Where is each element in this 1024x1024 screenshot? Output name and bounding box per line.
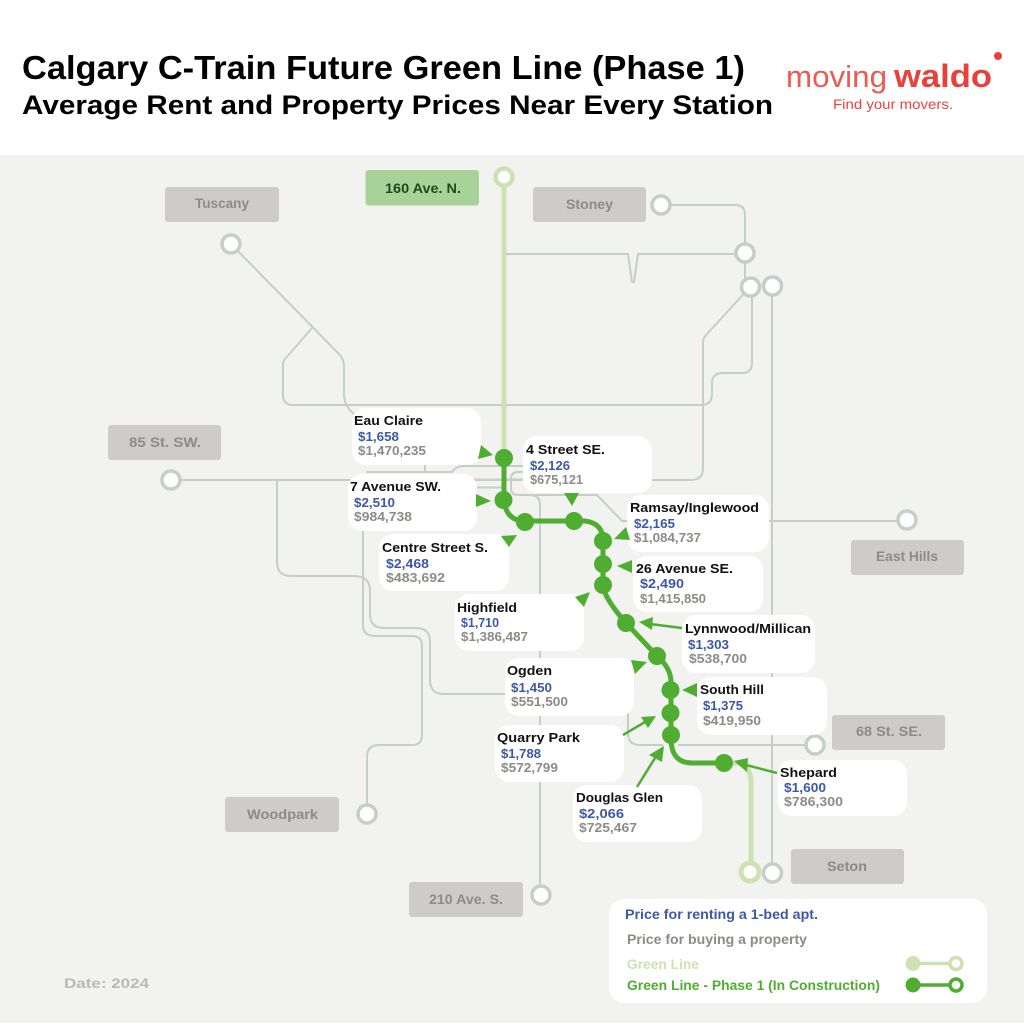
card: Douglas Glen xyxy=(573,785,702,842)
card: Shepard: $786,300 xyxy=(784,794,843,809)
card: 26 Avenue SE.: $1,415,850 xyxy=(640,591,706,606)
logo: moving waldo: Find your movers. xyxy=(833,96,953,112)
card: Centre Street S.: $2,468 xyxy=(386,556,429,571)
date: Date: 2024 xyxy=(64,976,150,991)
card: 4 Street SE. xyxy=(523,436,652,493)
card: Lynnwood/Millican: Lynnwood/Millican xyxy=(685,621,811,636)
card: Lynnwood/Millican xyxy=(682,615,815,673)
title: Calgary C-Train Future Green Line (Phase 1) xyxy=(22,49,745,86)
card: Eau Claire: $1,470,235 xyxy=(358,443,426,458)
card: South Hill: $1,375 xyxy=(703,698,743,713)
card: 4 Street SE.: $675,121 xyxy=(530,472,583,487)
label: Tuscany: Tuscany xyxy=(195,195,249,211)
label: Tuscany xyxy=(165,187,279,222)
label: Stoney: Stoney xyxy=(566,196,613,212)
legend symbol: Green Line xyxy=(906,956,962,971)
card: South Hill: South Hill xyxy=(700,682,764,697)
card: Douglas Glen: Douglas Glen xyxy=(576,790,663,805)
card: Ogden xyxy=(505,658,634,716)
card: South Hill xyxy=(697,677,827,735)
label: Woodpark xyxy=(225,797,339,832)
label: East Hills: East Hills xyxy=(876,548,938,564)
card: Ramsay/Inglewood xyxy=(627,495,769,552)
pointer arrows xyxy=(476,445,777,787)
card: Centre Street S. xyxy=(379,534,509,591)
card: Eau Claire: $1,658 xyxy=(358,429,399,444)
legend: Price for renting a 1-bed apt. xyxy=(625,907,818,922)
card: 4 Street SE.: 4 Street SE. xyxy=(526,442,605,457)
Phase 1 stations xyxy=(494,449,733,772)
label: 68 St. SE. xyxy=(832,715,945,750)
card: Highfield: $1,386,487 xyxy=(461,629,528,644)
card: 7 Avenue SW.: 7 Avenue SW. xyxy=(350,479,441,494)
legend symbol: Phase 1 xyxy=(906,978,962,992)
card: Shepard: $1,600 xyxy=(784,780,826,795)
label: Seton xyxy=(791,849,904,884)
terminal stop: 160 Ave. N. xyxy=(496,168,512,186)
card: Ogden: $1,450 xyxy=(511,680,552,695)
card: Shepard xyxy=(778,760,907,816)
label: 85 St. SW.: 85 St. SW. xyxy=(129,434,201,450)
label: Stoney xyxy=(533,187,646,222)
card: Douglas Glen: $2,066 xyxy=(579,806,624,821)
card: Ramsay/Inglewood: $2,165 xyxy=(634,516,675,531)
card: 26 Avenue SE.: $2,490 xyxy=(640,576,684,591)
logo: moving waldo xyxy=(786,52,1002,112)
legend: Green Line xyxy=(627,957,699,972)
card: Ogden: $551,500 xyxy=(511,694,568,709)
card: 26 Avenue SE.: 26 Avenue SE. xyxy=(636,561,733,576)
card: Quarry Park: $1,788 xyxy=(501,746,541,761)
label: 160 Ave. N.: 160 Ave. N. xyxy=(385,180,461,196)
grey network lines xyxy=(171,205,907,895)
card: Quarry Park: $572,799 xyxy=(501,760,558,775)
legend: Price for buying a property xyxy=(627,932,807,947)
legend: Green Line - Phase 1 (In Construction) xyxy=(627,978,880,993)
card: Shepard: Shepard xyxy=(780,765,837,780)
logo: moving waldo: moving xyxy=(786,59,887,94)
terminal stop: Green Line south xyxy=(741,863,759,881)
title xyxy=(22,49,773,120)
card: Quarry Park: Quarry Park xyxy=(497,730,581,745)
card: 4 Street SE.: $2,126 xyxy=(530,458,570,473)
card: 7 Avenue SW.: $984,738 xyxy=(354,509,412,524)
card: Quarry Park xyxy=(495,725,624,782)
card: 7 Avenue SW. xyxy=(348,474,477,531)
grey terminal stops xyxy=(162,196,916,904)
label: Woodpark: Woodpark xyxy=(247,806,318,822)
card: Eau Claire xyxy=(352,408,481,465)
label: Seton: Seton xyxy=(827,858,867,874)
Green Line Phase 1 route xyxy=(504,458,724,763)
label: 160 Ave. N. xyxy=(366,170,479,206)
label: East Hills xyxy=(851,540,964,575)
label: 85 St. SW. xyxy=(108,425,221,460)
card: Highfield: Highfield xyxy=(457,600,517,615)
label: 210 Ave. S.: 210 Ave. S. xyxy=(429,891,503,907)
label: 68 St. SE.: 68 St. SE. xyxy=(856,723,922,739)
card: 7 Avenue SW.: $2,510 xyxy=(354,495,395,510)
card: Ramsay/Inglewood: Ramsay/Inglewood xyxy=(630,500,759,515)
label: 210 Ave. S. xyxy=(409,882,523,917)
card: Highfield: $1,710 xyxy=(461,615,499,630)
card: 26 Avenue SE. xyxy=(633,556,763,612)
card: Lynnwood/Millican: $538,700 xyxy=(689,651,747,666)
card: Lynnwood/Millican: $1,303 xyxy=(688,637,729,652)
Green Line (future sections) xyxy=(504,177,751,873)
card: Highfield xyxy=(455,594,584,651)
card: Centre Street S.: Centre Street S. xyxy=(382,540,488,555)
card: South Hill: $419,950 xyxy=(703,713,761,728)
title: Average Rent and Property Prices Near Every Station xyxy=(22,90,773,120)
legend xyxy=(609,899,987,1003)
card: Eau Claire: Eau Claire xyxy=(354,413,423,428)
card: Ramsay/Inglewood: $1,084,737 xyxy=(634,530,701,545)
card: Douglas Glen: $725,467 xyxy=(579,820,637,835)
logo: moving waldo: waldo xyxy=(893,58,992,94)
card: Centre Street S.: $483,692 xyxy=(386,570,445,585)
card: Ogden: Ogden xyxy=(507,663,552,678)
